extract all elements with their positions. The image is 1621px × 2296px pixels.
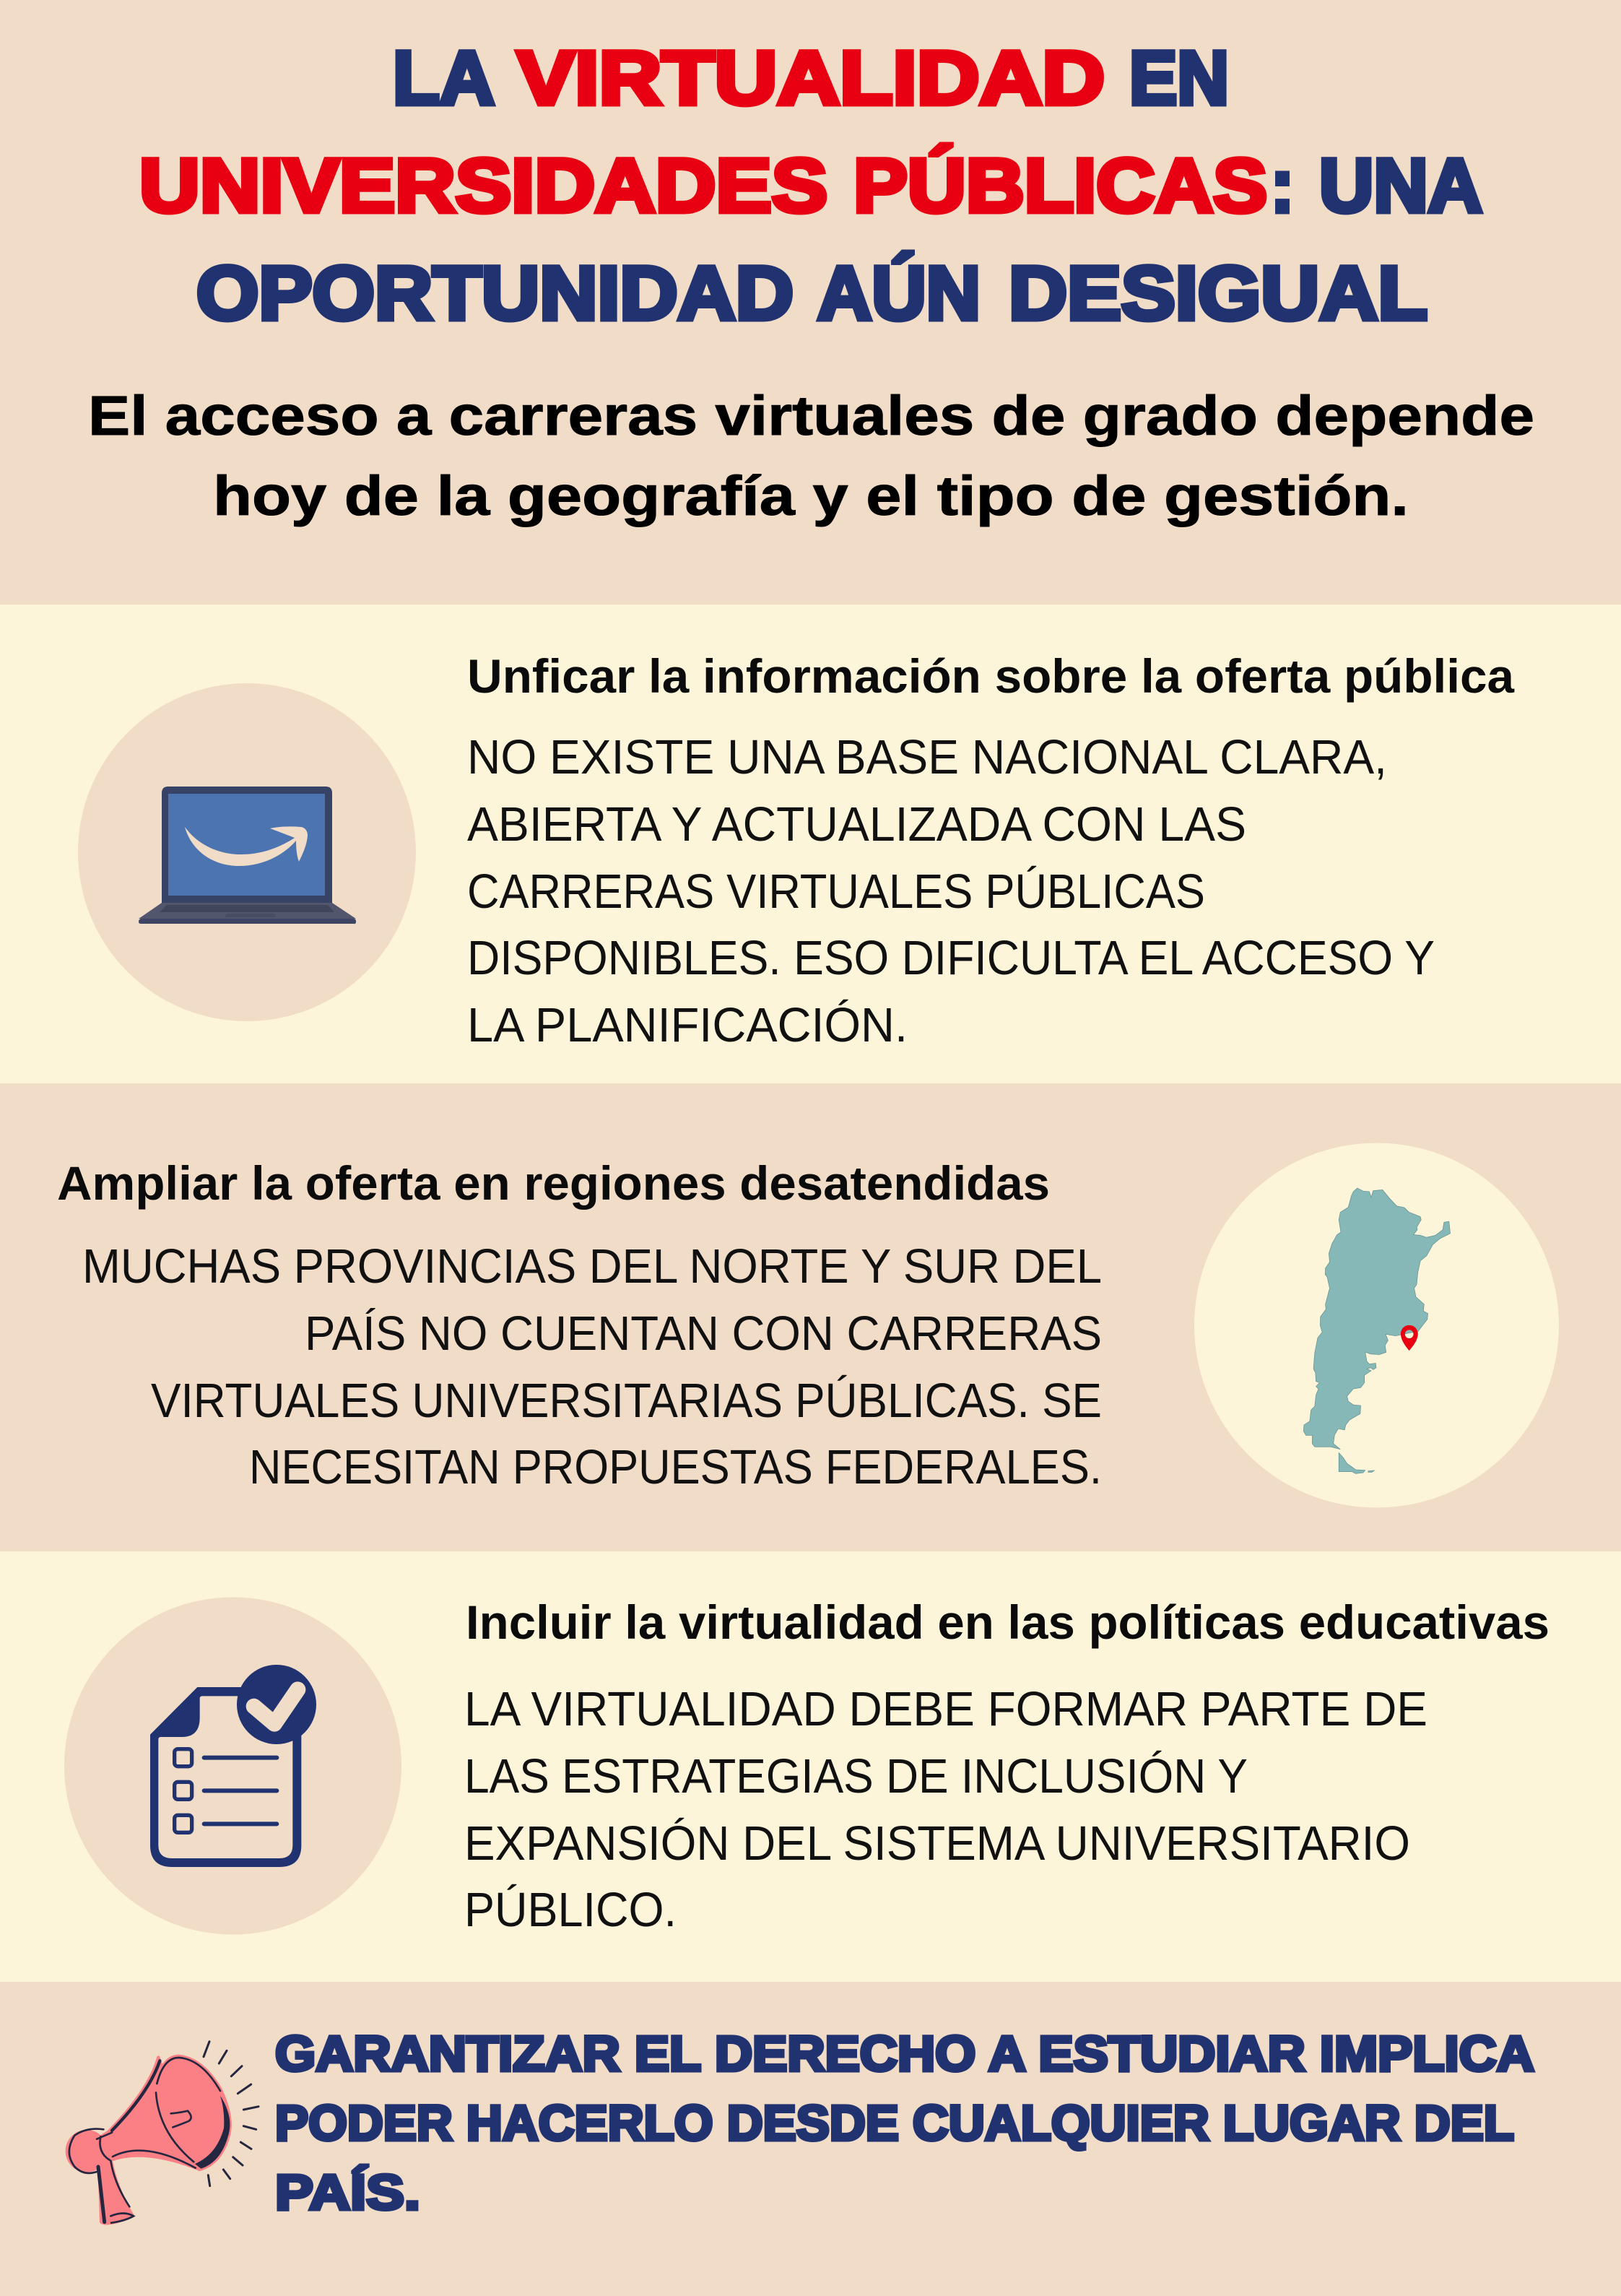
body text: DISPONIBLES. ESO DIFICULTA EL ACCESO Y (467, 931, 1435, 985)
closing statement: PODER HACERLO DESDE CUALQUIER LUGAR DEL (275, 2095, 1514, 2151)
body text (464, 1682, 1427, 1937)
body text: LA VIRTUALIDAD DEBE FORMAR PARTE DE (464, 1682, 1427, 1736)
title: OPORTUNIDAD (196, 251, 794, 336)
panel: conclusion (0, 1982, 1621, 2296)
body text: CARRERAS VIRTUALES PÚBLICAS (467, 865, 1205, 919)
panel: ampliar la oferta (0, 1083, 1621, 1551)
body text: ABIERTA Y ACTUALIZADA CON LAS (467, 797, 1246, 852)
subtitle: El acceso a carreras virtuales de grado depende (88, 385, 1534, 447)
title: : (1271, 144, 1294, 228)
panel: unificar la información (0, 605, 1621, 1083)
panel: incluir la virtualidad (0, 1551, 1621, 1982)
title: UNA (1319, 144, 1482, 228)
title: LA (393, 36, 495, 121)
body text: NECESITAN PROPUESTAS FEDERALES. (249, 1440, 1102, 1494)
subtitle: hoy de la geografía y el tipo de gestión. (213, 465, 1409, 527)
title: PÚBLICAS (853, 144, 1267, 228)
body text: LA PLANIFICACIÓN. (467, 998, 908, 1052)
icon: megaphone (67, 2042, 258, 2224)
body text (467, 730, 1435, 1052)
body text: PÚBLICO. (464, 1883, 677, 1937)
icon: laptop in circle (78, 683, 416, 1021)
subtitle (88, 385, 1534, 527)
body text: EXPANSIÓN DEL SISTEMA UNIVERSITARIO (464, 1816, 1410, 1871)
panel: header (0, 0, 1621, 605)
title: VIRTUALIDAD (517, 36, 1105, 121)
body text: MUCHAS PROVINCIAS DEL NORTE Y SUR DEL (82, 1239, 1102, 1294)
title: UNIVERSIDADES (139, 144, 827, 228)
title (139, 36, 1482, 336)
body text: NO EXISTE UNA BASE NACIONAL CLARA, (467, 730, 1387, 784)
closing statement: GARANTIZAR EL DERECHO A ESTUDIAR IMPLICA (275, 2026, 1534, 2081)
icon: checklist in circle (64, 1598, 401, 1934)
heading: Incluir la virtualidad en las políticas educativas (466, 1595, 1550, 1649)
body text: PAÍS NO CUENTAN CON CARRERAS (305, 1307, 1102, 1361)
closing statement: PAÍS. (275, 2165, 420, 2220)
closing statement (275, 2026, 1534, 2220)
body text: VIRTUALES UNIVERSITARIAS PÚBLICAS. SE (151, 1374, 1102, 1428)
title: DESIGUAL (1009, 251, 1427, 336)
icon: map of Argentina in circle (1194, 1143, 1559, 1508)
title: EN (1129, 36, 1229, 121)
body text (82, 1239, 1102, 1494)
icon: location pin (1401, 1325, 1418, 1351)
heading: Unficar la información sobre la oferta pública (467, 649, 1515, 703)
body text: LAS ESTRATEGIAS DE INCLUSIÓN Y (464, 1749, 1248, 1803)
heading: Ampliar la oferta en regiones desatendidas (57, 1156, 1050, 1210)
title: AÚN (817, 251, 981, 336)
